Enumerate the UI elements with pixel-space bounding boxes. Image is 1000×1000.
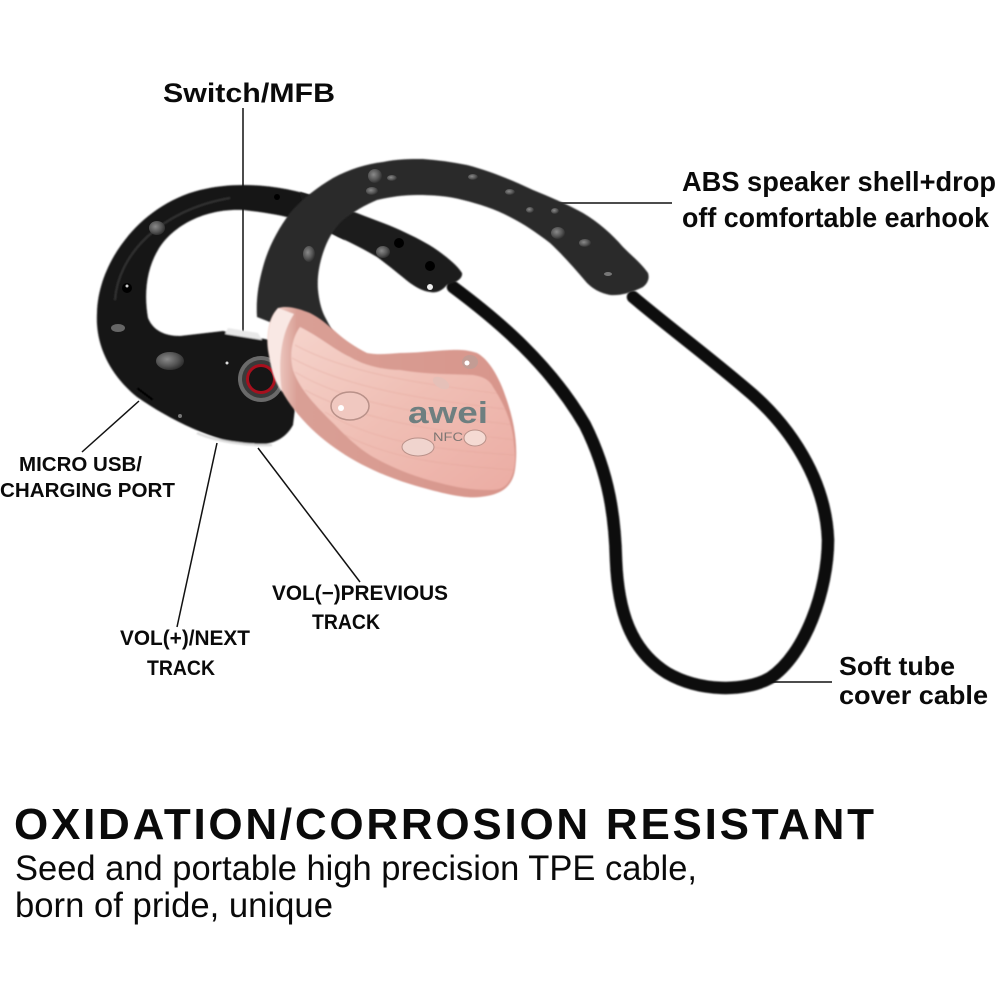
label: micro USB charging port: MICRO USB/ [19, 454, 142, 476]
label: micro USB charging port [0, 454, 175, 502]
shell water drops and logo [331, 355, 488, 456]
neck cable [453, 287, 828, 688]
awei logo: awei [408, 395, 488, 430]
heading: OXIDATION/CORROSION RESISTANT [14, 800, 874, 849]
label: ABS speaker shell: ABS speaker shell+drop [682, 166, 996, 197]
shell wood-grain texture [293, 345, 370, 402]
button strips [225, 328, 262, 340]
label: volume up next track: VOL(+)/NEXT [120, 627, 250, 650]
left earhook and body [97, 185, 345, 445]
label: soft tube cover cable: Soft tube [839, 651, 955, 681]
label: volume down previous track: VOL(−)PREVIOUS [272, 582, 448, 605]
NFC mark: NFC [433, 430, 463, 444]
speaker driver [238, 356, 284, 402]
label: Switch/MFB: Switch/MFB [163, 78, 335, 108]
label: volume down previous track: TRACK [312, 611, 380, 634]
hook water drops [111, 169, 612, 418]
label: volume up next track: TRACK [147, 657, 215, 680]
earphone illustration [97, 159, 828, 688]
label: ABS speaker shell: off comfortable earhook [682, 202, 989, 233]
label: soft tube cover cable: cover cable [839, 680, 988, 710]
description text [15, 849, 697, 925]
label: micro USB charging port: CHARGING PORT [0, 480, 175, 502]
description text: Seed and portable high precision TPE cable, [15, 849, 697, 888]
label: ABS speaker shell [682, 166, 996, 233]
description text: born of pride, unique [15, 886, 333, 925]
pink speaker shell [267, 307, 516, 497]
right earhook [257, 159, 649, 332]
leader lines [82, 108, 832, 682]
label: volume up next track [120, 627, 250, 680]
label: volume down previous track [272, 582, 448, 634]
rear cable arm [300, 192, 462, 292]
label: soft tube cover cable [839, 651, 988, 710]
